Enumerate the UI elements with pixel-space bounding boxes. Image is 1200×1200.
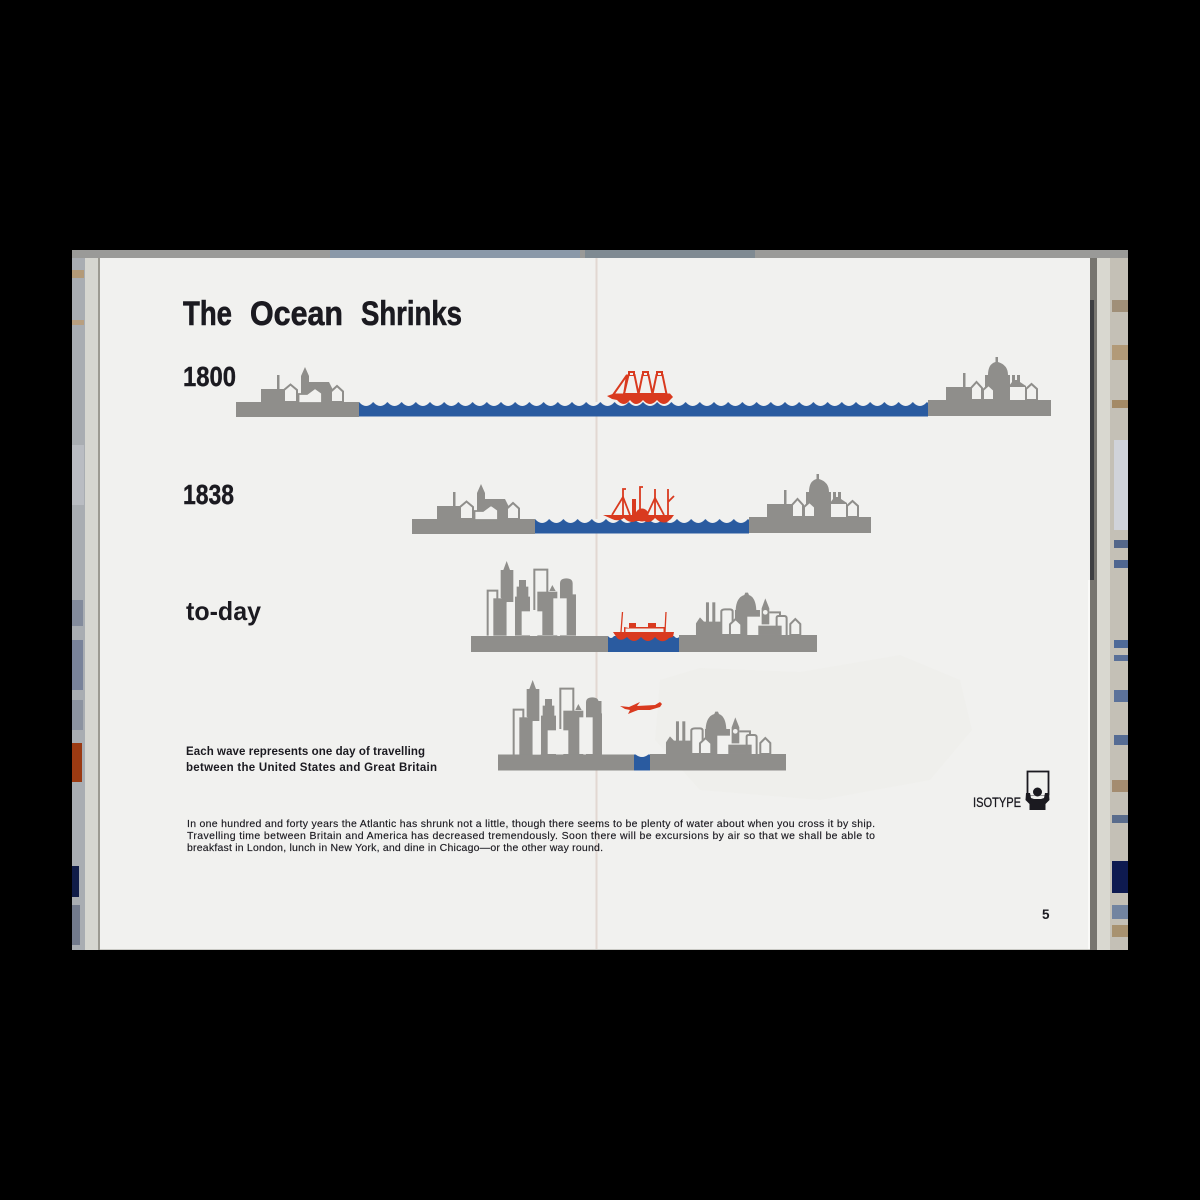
panel: book cover edges	[72, 250, 1128, 950]
row label: 1838: 1838	[183, 479, 234, 510]
land: New York by air	[498, 680, 634, 770]
land: right coast 1800	[928, 357, 1051, 416]
page number: 5	[1042, 907, 1050, 922]
title	[183, 295, 462, 333]
land: London by air	[650, 712, 786, 770]
icon: figure holding sign	[1026, 772, 1050, 810]
title: Shrinks	[361, 295, 462, 333]
ocean: to-day water	[608, 636, 680, 652]
row: 1800 crossing	[236, 357, 1051, 417]
title: Ocean	[250, 295, 343, 333]
caption: wave key: between the United States and Great Britain	[186, 762, 437, 774]
paragraph: In one hundred and forty years the Atlantic has shrunk not a little, though there seems to be plenty of water about when you cross it by ship.	[187, 818, 875, 830]
row: to-day air crossing	[498, 680, 786, 770]
row label: 1800: 1800	[183, 361, 236, 392]
icon: sailing ship	[607, 372, 673, 404]
panel: book page	[100, 258, 1090, 949]
logo: ISOTYPE: ISOTYPE	[973, 795, 1021, 810]
caption: wave key	[186, 746, 437, 774]
land: London to-day	[679, 593, 817, 652]
land: New York to-day	[471, 561, 608, 652]
ocean: air crossing water	[634, 754, 650, 770]
row label: to-day: to-day	[186, 596, 262, 626]
ghost show-through	[655, 655, 972, 800]
land: right coast 1838	[749, 474, 871, 533]
row: to-day ship crossing	[471, 561, 817, 652]
icon: aeroplane	[620, 702, 662, 714]
logo: ISOTYPE	[973, 772, 1050, 810]
land: left coast 1838	[412, 484, 535, 534]
paragraph: breakfast in London, lunch in New York, and dine in Chicago—or the other way round.	[187, 842, 603, 854]
title: The	[183, 295, 232, 333]
ocean: 1838 waves	[535, 519, 749, 534]
icon: ocean liner	[613, 612, 674, 641]
ocean: 1800 waves	[359, 402, 928, 416]
paragraph	[187, 818, 875, 854]
icon: paddle steamer	[603, 487, 674, 522]
page crease	[596, 258, 598, 949]
row: 1838 crossing	[412, 474, 871, 534]
land: left coast 1800	[236, 367, 359, 417]
caption: wave key: Each wave represents one day of travelling	[186, 746, 425, 758]
paragraph: Travelling time between Britain and America has decreased tremendously. Soon there will be excursions by air so that we shall be able to	[187, 830, 875, 842]
